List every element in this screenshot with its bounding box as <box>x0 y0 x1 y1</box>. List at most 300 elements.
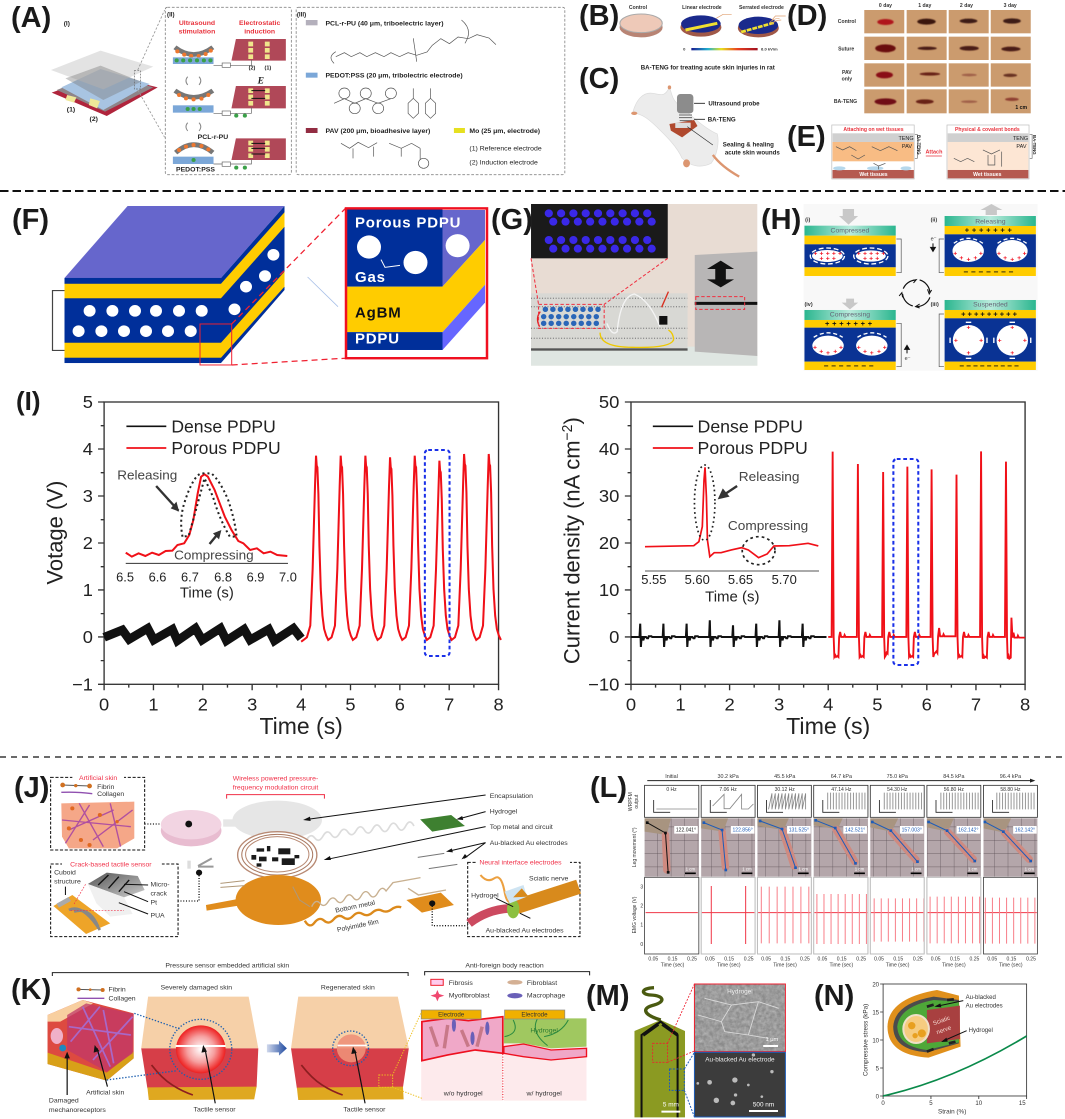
EMG voltage row: 0.15 <box>724 956 734 962</box>
state ii releasing: +++++++ <box>965 225 1015 234</box>
label M: (M) <box>586 980 629 1012</box>
adhesion schematic right: Physical & covalent bonds <box>955 127 1020 133</box>
EMG voltage row: 0.05 <box>705 956 715 962</box>
anti-foreign body panel: Myofibroblast <box>449 992 490 999</box>
box II: ultrasound and induction: (II) <box>167 12 175 19</box>
axes: 1 <box>83 580 93 600</box>
panel I: current chart <box>559 392 1030 739</box>
EMG voltage row: 0 <box>640 942 643 948</box>
axes: 20 <box>599 533 619 553</box>
EMG voltage row: Time (sec) <box>830 963 853 969</box>
leg movement row: 162.142° <box>1015 827 1035 833</box>
anti-foreign body panel: Anti-foreign body reaction <box>465 962 544 969</box>
box II: ultrasound and induction: Electrostatic <box>239 20 281 27</box>
WRPFM output row: 54.30 Hz <box>887 787 908 793</box>
inset releasing/compressing: 6.8 <box>214 569 232 584</box>
panel H: working mechanism <box>803 204 1038 371</box>
WRPFM output row: 0 Hz <box>666 787 677 793</box>
EMG voltage row: Time (sec) <box>886 963 910 969</box>
axes: −10 <box>588 674 619 694</box>
state i compressed: ++++++++ <box>813 250 842 262</box>
transition arrow <box>267 1041 287 1056</box>
leg movement row: 131.525° <box>789 827 809 833</box>
crack-based sensor box: Cuboid <box>54 869 76 876</box>
main header: Pressure sensor embedded artificial skin <box>165 962 289 969</box>
wound photo grid: 1 day <box>918 3 932 9</box>
EMG voltage row: Time (sec) <box>942 963 966 969</box>
pressure arrow and column titles: Initial <box>665 774 678 780</box>
axes <box>863 982 1027 1115</box>
circuit heading: Wireless powered pressure- <box>233 776 318 783</box>
trace labels <box>335 900 380 934</box>
axes: 0 <box>99 695 109 715</box>
porous trace <box>301 454 501 642</box>
row labels: EMG voltage (V) <box>632 896 638 933</box>
nerve cuff illustration: Au electrodes <box>966 1004 1003 1010</box>
inset: 5.70 <box>772 572 797 587</box>
axes: −2 <box>560 424 576 440</box>
EMG voltage row: Time (sec) <box>717 963 741 969</box>
label B: (B) <box>579 0 619 32</box>
label A: (A) <box>11 2 51 34</box>
leg movement row: 162.142° <box>958 827 978 833</box>
layer callouts <box>303 793 568 860</box>
electrode labels: (1) <box>67 107 75 114</box>
axes: 3 <box>247 695 257 715</box>
dense trace <box>631 620 827 647</box>
Au electrode SEM: 500 nm <box>753 1101 774 1108</box>
artificial skin box: Artificial skin <box>79 775 117 782</box>
layer callouts: Au-blacked Au electrodes <box>490 840 568 847</box>
leg movement row: 157.003° <box>902 827 922 833</box>
callouts <box>49 1013 386 1114</box>
axes: 0 <box>876 1094 880 1100</box>
state iii suspended: −−−−−−−−− <box>959 362 1021 371</box>
panels B, C, D, E <box>620 3 1037 179</box>
EMG voltage row: 3 <box>640 885 643 891</box>
panel J: artificial skin device <box>51 773 580 937</box>
highlight box <box>425 450 450 656</box>
axes: 2 <box>198 695 208 715</box>
axes: Time (s) <box>786 713 870 739</box>
axes: ) <box>559 417 585 425</box>
wound photo grid: 2 day <box>960 3 973 9</box>
EMG voltage row: 0.15 <box>668 956 678 962</box>
EMG voltage row: 0.25 <box>856 956 866 962</box>
trace labels: Bottom metal <box>335 900 376 915</box>
pressure arrow and column titles: 84.5 kPa <box>943 774 965 780</box>
adhesion schematic left: TENG <box>898 136 914 142</box>
box III: materials legend: (1) Reference electrode <box>469 145 542 152</box>
device photo <box>634 984 694 1118</box>
axes <box>559 392 1030 739</box>
leg movement row: 142.521° <box>845 827 865 833</box>
panel F: porous structure <box>52 206 487 365</box>
pressure arrow and column titles: 64.7 kPa <box>831 774 852 780</box>
adhesion schematic left: PAV <box>902 144 912 150</box>
axes: 8 <box>1020 695 1030 715</box>
leg movement row <box>645 818 1037 877</box>
EMG voltage row: 0.25 <box>913 956 923 962</box>
neural interface box: Hydrogel <box>471 892 499 899</box>
EMG voltage row: Time (sec) <box>661 963 685 969</box>
EMG voltage row: 0.15 <box>950 956 960 962</box>
layer callouts: Top metal and circuit <box>490 824 553 831</box>
BA-TENG brackets <box>915 134 1037 158</box>
axes: 3 <box>774 695 784 715</box>
panel I: voltage chart <box>42 392 504 739</box>
wound photo grid: BA-TENG <box>834 99 857 105</box>
title C: BA-TENG for treating acute skin injuries in rat <box>641 66 775 72</box>
pressure arrow and column titles: 75.0 kPa <box>887 774 908 780</box>
device photo: 5 mm <box>663 1101 679 1108</box>
inset: 5.60 <box>685 572 710 587</box>
main header <box>52 962 408 976</box>
BA-TENG brackets: BA-TENG <box>1032 135 1037 155</box>
WRPFM output row <box>645 785 1037 817</box>
leg movement row: 1 cm <box>742 866 752 871</box>
crack-based sensor box: structure <box>54 878 81 885</box>
inset releasing/compressing: Time (s) <box>180 585 234 601</box>
collagen legend <box>76 987 136 1003</box>
wound photo grid: Suture <box>838 46 854 52</box>
box II: ultrasound and induction: PEDOT:PSS <box>176 166 215 173</box>
layer callouts: Hydrogel <box>490 809 518 816</box>
state iv compressing: (iv) <box>804 302 813 308</box>
WRPFM output row: 58.80 Hz <box>1000 787 1021 793</box>
label D: (D) <box>787 0 827 32</box>
panel G: LED photo <box>531 204 757 366</box>
axes: Current density (nA cm <box>559 440 585 664</box>
hydrogel SEM: 1 μm <box>766 1037 779 1043</box>
axes: 30 <box>599 486 619 506</box>
EMG voltage row: 0.25 <box>800 956 810 962</box>
axes: 5 <box>876 1066 880 1072</box>
inset: Compressing <box>728 518 808 533</box>
neural interface box: Neural interface electrodes <box>479 859 562 866</box>
leg movement row: 1 cm <box>968 866 978 871</box>
box II: ultrasound and induction: stimulation <box>179 29 215 36</box>
inset releasing/compressing: 6.9 <box>247 569 264 584</box>
wound photo grid: PAV <box>842 70 852 76</box>
axes: 2 <box>724 695 735 715</box>
state i compressed: ++++++++ <box>857 250 885 262</box>
row labels: output <box>634 794 640 809</box>
legend: Dense PDPU <box>698 417 803 436</box>
rat annotation labels: acute skin wounds <box>725 150 780 156</box>
wound photo grid: only <box>842 76 852 82</box>
inset releasing/compressing: 6.5 <box>116 569 134 584</box>
sensor pieces with link <box>178 858 214 901</box>
stress curve <box>883 1036 1027 1096</box>
leg movement row: 1 cm <box>686 866 696 871</box>
wound photo grid <box>834 3 1031 113</box>
highlight box <box>893 459 918 665</box>
row labels: WRPFM <box>628 792 634 811</box>
panel A: device structure <box>51 7 565 175</box>
pressure arrow and column titles: 30.2 kPa <box>717 774 739 780</box>
label H: (H) <box>761 204 801 236</box>
inset releasing/compressing: 6.7 <box>181 569 199 584</box>
adhesion schematic right <box>947 125 1029 179</box>
state ii releasing: ++++++++++ <box>953 251 1027 263</box>
axes: 4 <box>83 439 93 459</box>
anti-foreign body panel: w/o hydrogel <box>443 1090 483 1097</box>
exploded device layers <box>51 10 165 137</box>
box II: ultrasound and induction <box>165 7 291 175</box>
collagen legend: Fibrin <box>108 987 126 994</box>
leg movement row: 122.856° <box>732 827 753 833</box>
dense trace <box>104 628 301 641</box>
box II: ultrasound and induction: E <box>257 76 264 86</box>
pressure arrow and column titles: 96.4 kPa <box>1000 774 1021 780</box>
polyimide base <box>206 875 454 925</box>
axes: Time (s) <box>259 713 343 739</box>
leg movement row: 1 cm <box>911 866 921 871</box>
detail box: AgBM <box>355 306 402 322</box>
axes: 1 <box>675 695 686 715</box>
callouts: mechanoreceptors <box>49 1107 106 1114</box>
inset: 5.65 <box>728 572 753 587</box>
nerve cuff illustration: Hydrogel <box>969 1028 993 1034</box>
electrode labels: (2) <box>90 116 98 123</box>
EMG voltage row: 0.25 <box>969 956 980 962</box>
link to neural box <box>432 903 468 926</box>
box II: ultrasound and induction: (1) <box>264 65 271 71</box>
leg movement row: 1 cm <box>799 866 808 871</box>
state iii suspended: Suspended <box>973 302 1008 309</box>
Au electrode SEM <box>684 1052 785 1117</box>
damaged skin cube <box>48 1000 134 1081</box>
legend: Porous PDPU <box>698 438 808 458</box>
state iv compressing: e⁻ <box>905 356 911 362</box>
state i compressed: (i) <box>805 217 811 223</box>
porous trace <box>828 451 1025 659</box>
label G: (G) <box>491 204 533 236</box>
sub-label I: (I) <box>64 20 70 27</box>
state iv compressing: −−−−−−− <box>824 362 876 371</box>
adhesion schematic right: TENG <box>1013 136 1028 142</box>
label J: (J) <box>14 772 49 804</box>
pressure arrow and column titles: 45.5 kPa <box>774 774 795 780</box>
neural interface box <box>468 859 580 937</box>
state i compressed <box>804 209 901 276</box>
axes: 0 <box>83 627 93 647</box>
WRPFM output row: 7.06 Hz <box>719 787 737 793</box>
EMG voltage row: 0.25 <box>744 956 754 962</box>
state ii releasing: e⁻ <box>931 237 937 243</box>
inset releasing/compressing: Releasing <box>117 467 177 482</box>
axes: 0 <box>609 627 619 647</box>
leg movement row: 122.041° <box>676 827 696 833</box>
panel L: pressure response matrix <box>628 774 1037 969</box>
attach arrow: Attach <box>925 150 942 156</box>
state ii releasing: (ii) <box>931 217 937 223</box>
severely damaged skin block <box>141 984 258 1100</box>
EMG voltage row: 0.15 <box>1007 956 1017 962</box>
axes: −1 <box>72 674 93 694</box>
petri dishes and field colour bar <box>620 5 786 51</box>
electrode labels <box>67 107 98 123</box>
inset: 5.55 <box>641 572 666 587</box>
divider <box>0 756 1065 758</box>
label L: (L) <box>590 772 627 804</box>
wound photo grid: 1 cm <box>1015 105 1028 111</box>
anti-foreign body panel: Macrophage <box>527 992 565 999</box>
axes: 0 <box>881 1101 885 1107</box>
petri dishes and field colour bar: 0 <box>683 46 686 51</box>
row labels: Leg movement (°) <box>632 827 638 867</box>
inset releasing/compressing: Compressing <box>174 547 254 562</box>
hydrogel film <box>420 815 465 832</box>
leg movement row: 1 cm <box>1025 866 1034 871</box>
state ii releasing: −−−−−−− <box>963 268 1016 277</box>
box III: materials legend: PCL-r-PU (40 μm, triboelectric layer) <box>325 20 444 27</box>
callouts: Tactile sensor <box>194 1107 236 1114</box>
artificial skin box: Fibrin <box>97 784 115 791</box>
regenerated skin block <box>291 984 409 1100</box>
axes: 20 <box>872 982 880 988</box>
state ii releasing: Releasing <box>975 218 1006 225</box>
label K: (K) <box>11 974 51 1006</box>
axes: 5 <box>872 695 882 715</box>
EMG voltage row: 0.05 <box>648 956 658 962</box>
EMG voltage row: 0.15 <box>893 956 903 962</box>
trace labels: Polyimide film <box>336 919 380 934</box>
callouts: Tactile sensor <box>343 1107 386 1114</box>
rat annotation labels: BA-TENG <box>708 118 736 124</box>
circuit heading <box>227 776 324 799</box>
petri dishes and field colour bar: Serrated electrode <box>739 5 784 11</box>
severely damaged skin block: Severely damaged skin <box>161 984 232 991</box>
panel N: compressive stress chart <box>863 982 1027 1115</box>
legend: Porous PDPU <box>171 438 281 458</box>
WRPFM output row: 47.14 Hz <box>831 787 852 793</box>
EMG voltage row: 1 <box>640 923 643 929</box>
axes: 7 <box>971 695 981 715</box>
legend <box>653 417 808 458</box>
axes: 5 <box>929 1101 933 1107</box>
EMG voltage row: 0.25 <box>1026 956 1036 962</box>
label E: (E) <box>787 121 826 153</box>
callouts: Damaged <box>49 1098 79 1105</box>
axes: 10 <box>975 1101 983 1107</box>
nerve cuff illustration: nerve <box>936 1025 953 1036</box>
anti-foreign body panel: Electrode <box>438 1011 465 1018</box>
inset releasing/compressing: 6.6 <box>149 569 166 584</box>
box III: materials legend: Mo (25 μm, electrode) <box>469 128 540 135</box>
state iii suspended <box>931 300 1036 371</box>
adhesion schematic right: PAV <box>1016 144 1027 150</box>
detail box: Porous PDPU <box>355 216 461 232</box>
detail box <box>346 208 487 358</box>
label I: (I) <box>16 386 41 416</box>
axes: 8 <box>493 695 504 715</box>
state iii suspended: ++++++++ <box>954 324 1027 357</box>
WRPFM output row: 56.80 Hz <box>944 787 964 793</box>
crack-based sensor box: Crack-based tactile sensor <box>70 861 152 868</box>
state iv compressing <box>804 299 911 371</box>
EMG voltage row: Time (sec) <box>999 963 1023 969</box>
axes: 6 <box>395 695 405 715</box>
state i compressed: Compressed <box>831 228 870 235</box>
axes <box>42 392 504 739</box>
box III: materials legend: PAV (200 μm, bioadhesive layer) <box>325 128 430 135</box>
axes: Votage (V) <box>42 481 68 585</box>
nerve cuff illustration <box>887 990 1003 1058</box>
EMG voltage row <box>640 877 1037 969</box>
EMG voltage row: 0.25 <box>687 956 697 962</box>
anti-foreign body panel: w/ hydrogel <box>526 1090 562 1097</box>
inset releasing/compressing <box>116 467 297 601</box>
axes: 3 <box>83 486 93 506</box>
strip electrodes <box>418 853 457 869</box>
state iii suspended: +++++++++ <box>961 309 1019 318</box>
crack-based sensor box: Micro- <box>151 882 170 889</box>
neural interface box: Au-blacked Au electrodes <box>486 927 564 934</box>
hydrogel SEM: Hydrogel <box>727 988 753 995</box>
state iv compressing: ++++++++++ <box>813 345 887 357</box>
EMG voltage row: 0.05 <box>987 956 997 962</box>
zoom indicator <box>200 208 346 365</box>
crack-based sensor box <box>51 860 178 937</box>
anti-foreign body panel <box>379 962 590 1101</box>
petri dishes and field colour bar: Control <box>629 5 648 11</box>
circuit heading: frequency modulation circuit <box>233 784 318 791</box>
anti-foreign body panel: Electrode <box>521 1011 548 1018</box>
EMG voltage row: 0.05 <box>761 956 771 962</box>
wound photo grid: 0 day <box>879 3 892 9</box>
petri dishes and field colour bar: 6.0 kV/m <box>761 46 778 51</box>
state iv compressing: +++++++ <box>825 319 875 328</box>
coil and circuit <box>238 832 317 878</box>
EMG voltage row: 0.15 <box>780 956 791 962</box>
axes: 5 <box>83 392 93 412</box>
legend <box>126 416 281 458</box>
neural interface box: Sciatic nerve <box>529 876 569 883</box>
pressure arrow and column titles <box>647 774 1035 783</box>
legend: Dense PDPU <box>171 416 276 436</box>
callouts: Artificial skin <box>86 1089 125 1096</box>
state iii suspended: (iii) <box>931 302 939 308</box>
axes: 10 <box>599 580 619 600</box>
state iv compressing: Compressing <box>830 312 870 319</box>
box II: ultrasound and induction: induction <box>244 29 275 36</box>
label N: (N) <box>814 980 854 1012</box>
EMG voltage row: 0.05 <box>874 956 884 962</box>
anti-foreign body panel: Fibroblast <box>527 980 557 987</box>
encapsulation layer <box>223 801 414 840</box>
rat annotation labels <box>694 101 780 156</box>
box III: materials legend: (III) <box>297 12 306 19</box>
adhesion schematic left <box>832 125 914 179</box>
crack-based sensor box: PUA <box>151 912 165 919</box>
axes: 4 <box>296 695 306 715</box>
crack-based sensor box: crack <box>151 890 168 897</box>
label F: (F) <box>12 204 49 236</box>
EMG voltage row: 2 <box>640 904 643 910</box>
box III: materials legend <box>296 7 565 175</box>
divider <box>0 190 1065 192</box>
crack-based sensor box: Pt <box>151 899 157 906</box>
skin disk with link <box>145 810 221 846</box>
regenerated skin block: Regenerated skin <box>321 984 375 991</box>
axes: 5 <box>345 695 356 715</box>
axes: 50 <box>599 392 619 412</box>
wound photo grid: Control <box>838 19 857 25</box>
anti-foreign body panel: Hydrogel <box>530 1028 558 1035</box>
inset: Releasing <box>739 469 799 484</box>
